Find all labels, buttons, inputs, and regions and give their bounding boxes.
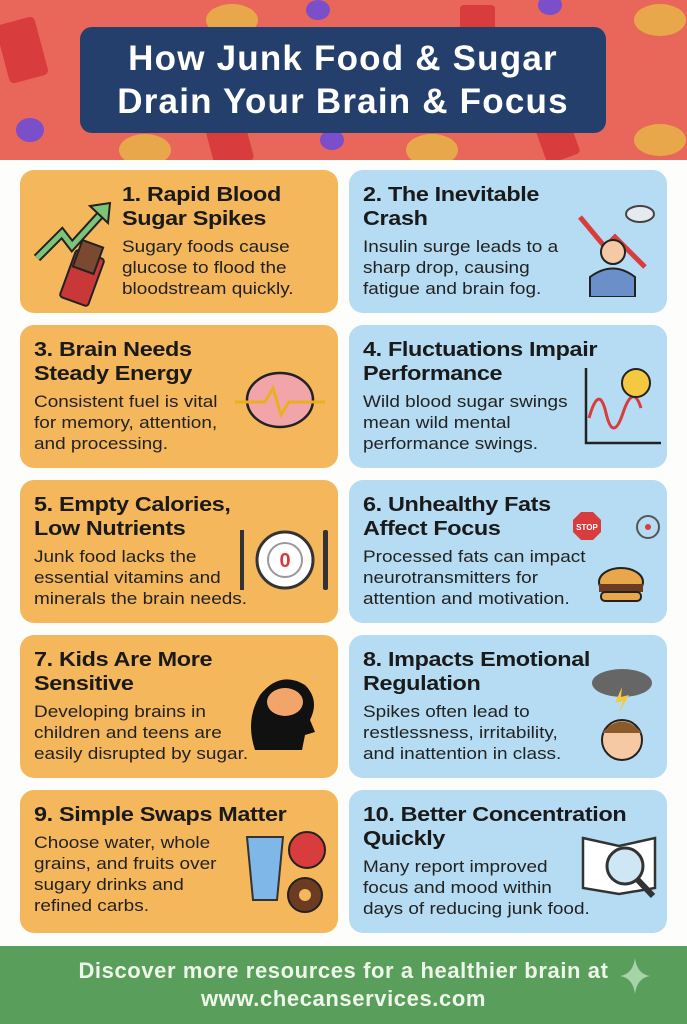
card 8: and inattention in class. [363, 745, 561, 763]
card 10: 10. Better Concentration [363, 804, 626, 826]
card 2 [349, 170, 667, 313]
card 9: sugary drinks and [34, 876, 184, 894]
card 2: fatigue and brain fog. [363, 280, 541, 298]
icon: storm cloud and sad child [592, 669, 652, 761]
card 6 [349, 480, 667, 623]
card 3: Steady Energy [34, 363, 192, 385]
card 2: Crash [363, 208, 428, 230]
card 3 [20, 325, 338, 468]
card 10: Many report improved [363, 858, 548, 876]
card 9: grains, and fruits over [34, 855, 216, 873]
card 2: Insulin surge leads to a [363, 238, 558, 256]
icon: sparkle [620, 958, 650, 994]
card 7 [20, 635, 338, 778]
card 7: 7. Kids Are More [34, 649, 212, 671]
card 6: neurotransmitters for [363, 569, 538, 587]
card 4: Performance [363, 363, 502, 385]
card 6: 6. Unhealthy Fats [363, 494, 551, 516]
card 9: Choose water, whole [34, 834, 210, 852]
card 10: Quickly [363, 828, 445, 850]
icon: tired person with falling arrow [578, 205, 655, 297]
icon: empty plate with fork and knife [240, 530, 328, 590]
card 9 [20, 790, 338, 933]
card 1: Sugar Spikes [122, 208, 266, 230]
card 3: for memory, attention, [34, 414, 217, 432]
card 4 [349, 325, 667, 468]
card 5 [20, 480, 338, 623]
card 10 [349, 790, 667, 933]
icon: open book with magnifier [582, 836, 656, 898]
card 3: Consistent fuel is vital [34, 393, 218, 411]
card 4: 4. Fluctuations Impair [363, 339, 597, 361]
title [80, 27, 606, 133]
icon: wave chart with worried face [584, 368, 661, 444]
footer: www.checanservices.com [201, 986, 486, 1011]
card 3: 3. Brain Needs [34, 339, 192, 361]
card 10: days of reducing junk food. [363, 900, 590, 918]
card 6: attention and motivation. [363, 590, 570, 608]
card 4: performance swings. [363, 435, 538, 453]
card 7: Developing brains in [34, 703, 206, 721]
card 2: sharp drop, causing [363, 259, 530, 277]
card 7: easily disrupted by sugar. [34, 745, 248, 763]
icon: rising arrow and chocolate [34, 202, 112, 307]
card 1: glucose to flood the [122, 259, 287, 277]
card 5: Low Nutrients [34, 518, 185, 540]
card 6: Affect Focus [363, 518, 501, 540]
card 8: 8. Impacts Emotional [363, 649, 590, 671]
footer: Discover more resources for a healthier brain at [78, 958, 609, 983]
icon: stop sign, burger, target: STOP [576, 523, 598, 532]
icon: brain with pulse [235, 372, 325, 428]
card 6: Processed fats can impact [363, 548, 586, 566]
title: Drain Your Brain & Focus [117, 82, 569, 121]
card 5: minerals the brain needs. [34, 590, 247, 608]
card 5: essential vitamins and [34, 569, 221, 587]
card 1: 1. Rapid Blood [122, 184, 281, 206]
card 1: Sugary foods cause [122, 238, 290, 256]
card 9: 9. Simple Swaps Matter [34, 804, 286, 826]
card 1 [20, 170, 338, 313]
icon: water glass, apple, donut [246, 831, 326, 913]
card 8: Spikes often lead to [363, 703, 530, 721]
icon: stop sign, burger, target [573, 512, 660, 602]
card 4: mean wild mental [363, 414, 511, 432]
footer [0, 946, 687, 1024]
card 3: and processing. [34, 435, 168, 453]
header banner [0, 0, 687, 160]
card 9: refined carbs. [34, 897, 149, 915]
icon: child head silhouette with brain [251, 679, 315, 750]
card 5: Junk food lacks the [34, 548, 196, 566]
card 7: Sensitive [34, 673, 134, 695]
card 10: focus and mood within [363, 879, 552, 897]
icon: empty plate with fork and knife: 0 [279, 550, 291, 572]
title: How Junk Food & Sugar [128, 39, 558, 78]
card 8: Regulation [363, 673, 480, 695]
card 7: children and teens are [34, 724, 222, 742]
card 2: 2. The Inevitable [363, 184, 539, 206]
card 4: Wild blood sugar swings [363, 393, 568, 411]
card 8 [349, 635, 667, 778]
card 1: bloodstream quickly. [122, 280, 294, 298]
card 8: restlessness, irritability, [363, 724, 558, 742]
card 5: 5. Empty Calories, [34, 494, 231, 516]
